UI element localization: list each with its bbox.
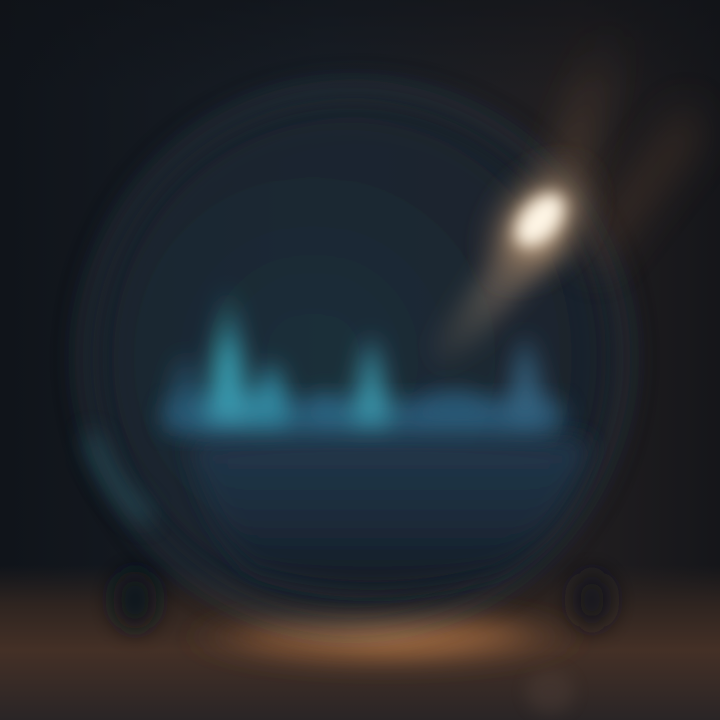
floor with warm glow [0,565,720,720]
vignette [0,0,720,90]
light beam downward [430,225,565,370]
waveform peaks [165,285,548,425]
light flare [439,118,641,326]
sphere ring [83,86,627,630]
light beam to the right [580,100,700,275]
light beam upward [545,30,628,210]
waveform band and bowl [165,400,590,590]
stands [113,570,612,630]
lower left teal reflection [92,440,145,515]
sphere body [83,86,627,630]
